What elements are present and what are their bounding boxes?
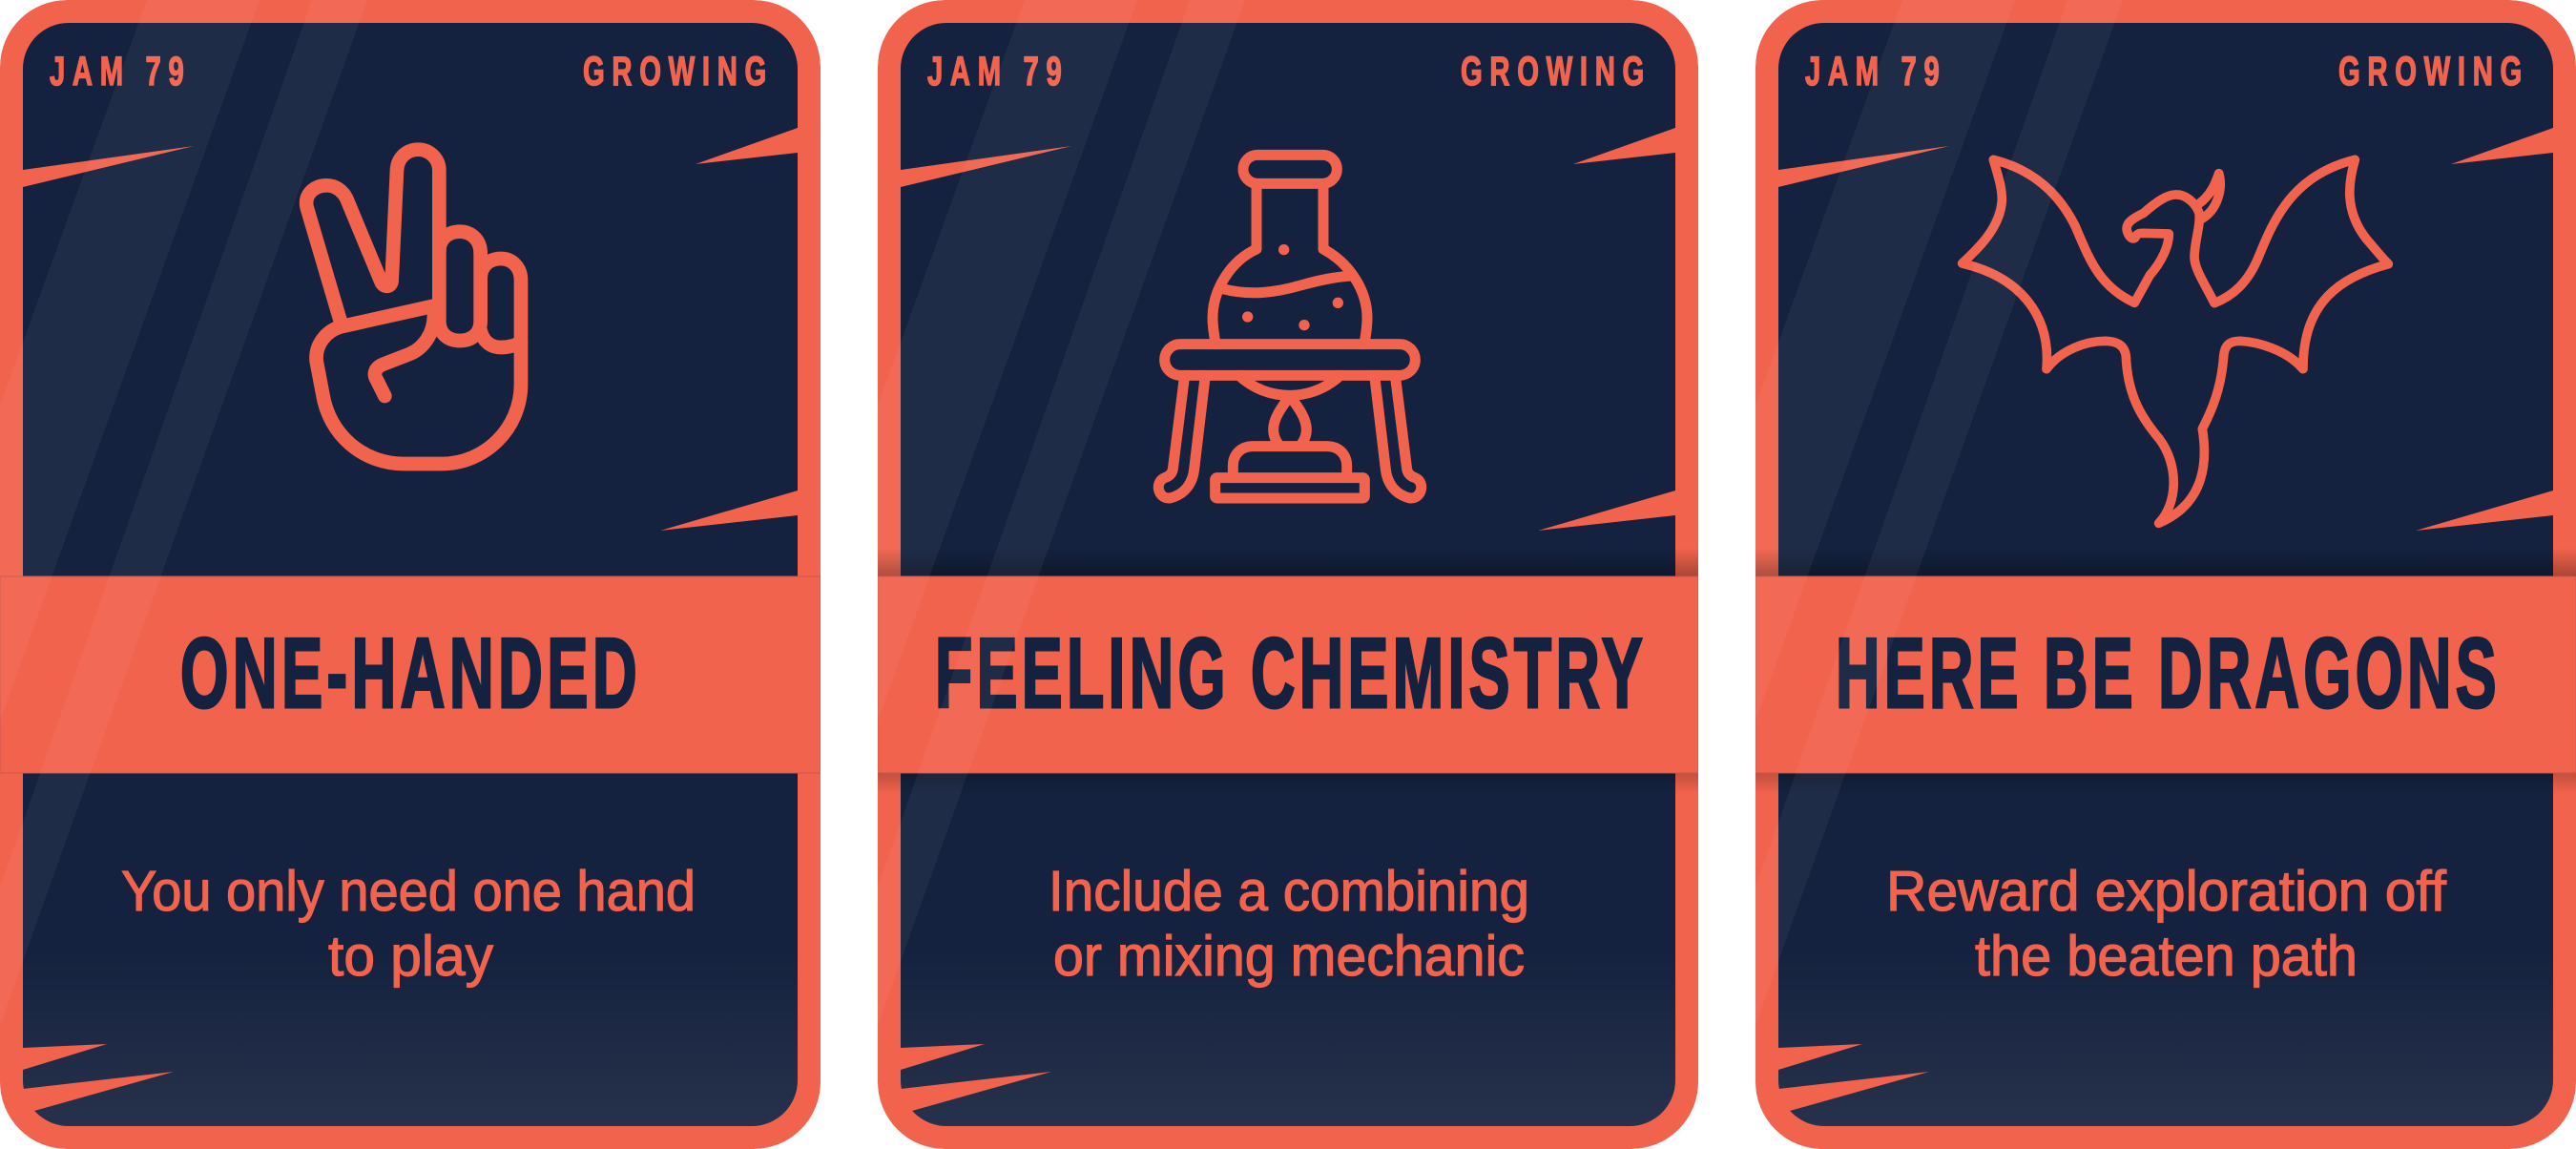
card inner background — [23, 23, 798, 1126]
body text — [1049, 860, 1529, 988]
title band — [878, 576, 1698, 773]
title band — [0, 576, 821, 773]
decorative spikes — [901, 128, 1675, 1111]
body text — [121, 860, 696, 988]
title band — [1755, 576, 2576, 773]
card frame — [1755, 0, 2576, 1149]
glass reflections — [878, 23, 1236, 960]
panel: card here be dragons — [1755, 0, 2576, 1149]
band shadow above — [878, 552, 1698, 576]
panel: card one-handed — [0, 0, 821, 1149]
label: jam number: JAM 79 — [50, 48, 191, 94]
label: theme: GROWING — [583, 48, 774, 94]
card inner background — [1778, 23, 2553, 1126]
glass reflections — [1755, 23, 2114, 960]
title: FEELING CHEMISTRY — [935, 618, 1647, 729]
label: theme: GROWING — [2338, 48, 2529, 94]
panel: card feeling chemistry — [878, 0, 1698, 1149]
icon: dragon — [1963, 159, 2388, 523]
icon: flask on burner stand — [1158, 155, 1422, 498]
label: jam number: JAM 79 — [927, 48, 1069, 94]
label: theme: GROWING — [1461, 48, 1652, 94]
icon: hand making a peace sign — [306, 150, 521, 464]
body text: or mixing mechanic — [1053, 925, 1525, 988]
decorative spikes — [23, 128, 798, 1111]
decorative spikes — [1778, 128, 2553, 1111]
band shadow above — [1755, 552, 2576, 576]
body text: Reward exploration off — [1886, 860, 2447, 923]
card frame — [878, 0, 1698, 1149]
body text: Include a combining — [1049, 860, 1529, 923]
body text: You only need one hand — [121, 860, 696, 923]
band shadow below — [878, 773, 1698, 790]
body text: the beaten path — [1975, 925, 2358, 988]
title: ONE-HANDED — [180, 618, 641, 729]
label: jam number: JAM 79 — [1805, 48, 1946, 94]
body text: to play — [328, 925, 493, 988]
card frame — [0, 0, 821, 1149]
band shadow below — [1755, 773, 2576, 790]
body text — [1886, 860, 2447, 988]
glass reflections — [23, 23, 359, 960]
card inner background — [901, 23, 1675, 1126]
